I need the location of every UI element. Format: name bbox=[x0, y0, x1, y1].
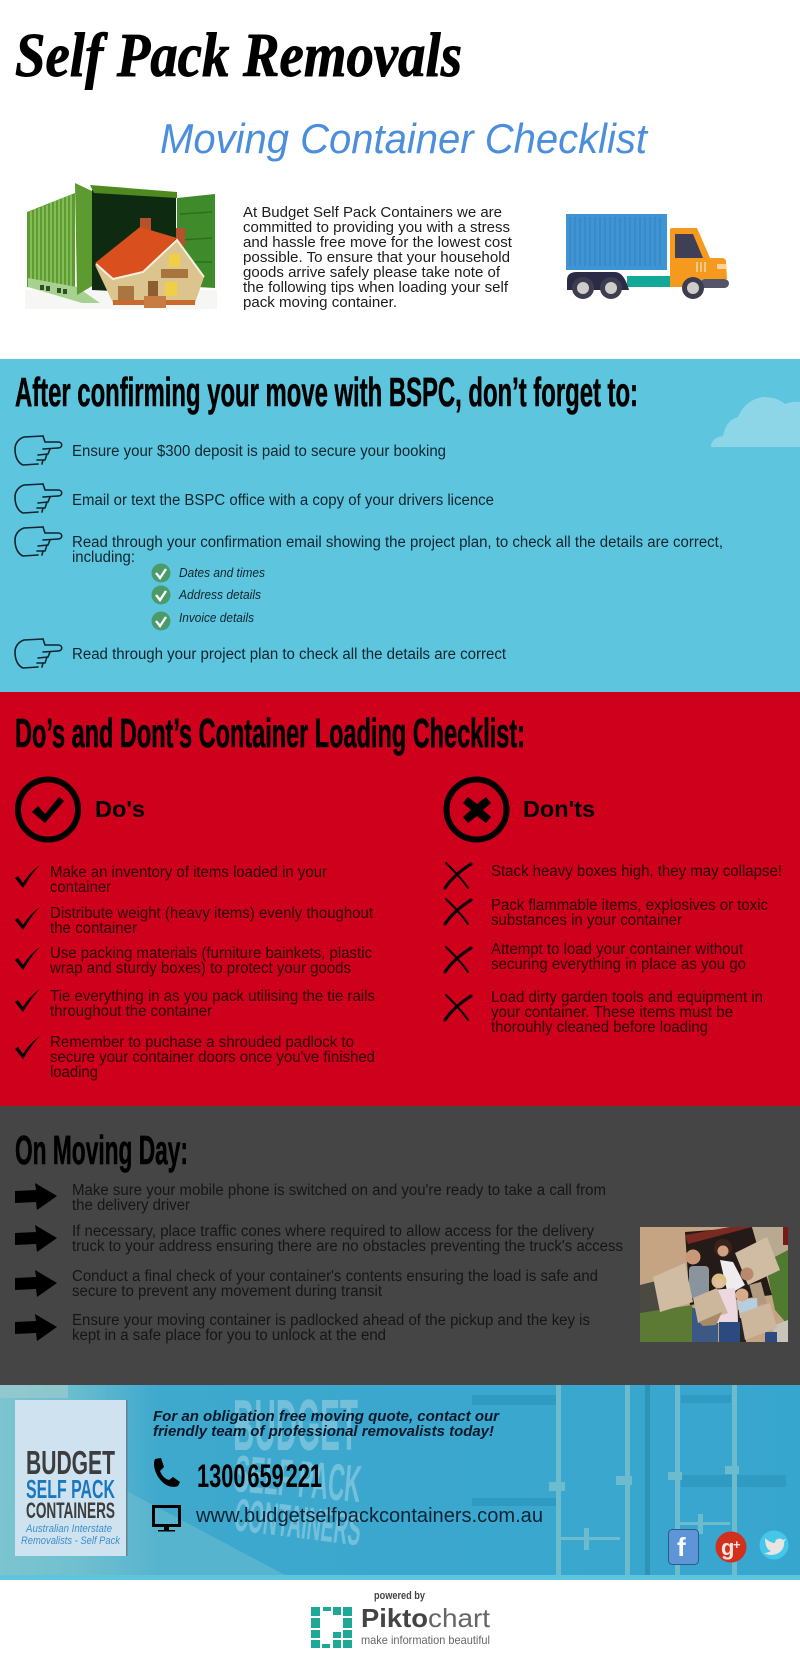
logo card: Removalists - Self Pack bbox=[21, 1535, 120, 1547]
call to action bbox=[153, 1408, 500, 1440]
sub-list: details: Dates and times bbox=[179, 566, 265, 580]
intro paragraph: possible. To ensure that your household bbox=[243, 249, 510, 266]
icon: facebook bbox=[668, 1530, 698, 1564]
list: don'ts: substances in your container bbox=[491, 912, 682, 929]
panel: contact footer: BUDGET bbox=[233, 1386, 358, 1466]
heading: do's: Do's bbox=[95, 796, 145, 822]
background text on container bbox=[232, 1386, 364, 1555]
sub-list: details: Address details bbox=[178, 588, 261, 602]
list: do's: container bbox=[50, 879, 111, 896]
list: don'ts: Load dirty garden tools and equipment in bbox=[491, 989, 763, 1006]
item: mobile phone: the delivery driver bbox=[72, 1197, 190, 1214]
item: licence: Email or text the BSPC office with a copy of your drivers licence bbox=[72, 492, 494, 509]
photo: family with boxes bbox=[640, 1227, 788, 1342]
piktochart wordmark: Pikto bbox=[361, 1603, 428, 1633]
call to action: friendly team of professional removalists today! bbox=[153, 1423, 494, 1440]
list: do's: secure your container doors once you've finished bbox=[50, 1049, 375, 1066]
phone number: 1300 659 221 bbox=[197, 1458, 322, 1494]
list: do's: the container bbox=[50, 920, 137, 937]
illustration: house in green container bbox=[25, 183, 217, 309]
item: licence bbox=[15, 484, 494, 513]
item: padlock: Ensure your moving container is padlocked ahead of the pickup and the key is bbox=[72, 1312, 590, 1329]
list: don'ts: Attempt to load your container without bbox=[491, 941, 744, 958]
logo card bbox=[15, 1400, 128, 1556]
list: do's: wrap and sturdy boxes) to protect your goods bbox=[49, 960, 351, 977]
list: do's: Distribute weight (heavy items) evenly thoughout bbox=[50, 905, 374, 922]
intro paragraph bbox=[243, 204, 513, 311]
list: do's: Remember to puchase a shrouded padlock to bbox=[50, 1034, 354, 1051]
item: traffic cones bbox=[15, 1223, 623, 1255]
sub-list: details: Invoice details bbox=[179, 611, 254, 625]
powered by: powered by bbox=[374, 1590, 426, 1602]
icon: google plus: + bbox=[733, 1537, 741, 1552]
item: confirmation email: Read through your confirmation email showing the project plan, to check all the details are correct, bbox=[72, 534, 723, 551]
page title: Self Pack Removals bbox=[15, 22, 462, 90]
logo card: SELF PACK bbox=[26, 1474, 115, 1504]
item: final check: secure to prevent any movement during transit bbox=[72, 1283, 383, 1300]
subtitle: Moving Container Checklist bbox=[160, 115, 649, 162]
item: traffic cones: If necessary, place traffic cones where required to allow access for the delivery bbox=[72, 1223, 594, 1240]
piktochart credit bbox=[311, 1590, 491, 1648]
logo card: BUDGET bbox=[26, 1444, 115, 1481]
list: don'ts: securing everything in place as you go bbox=[491, 956, 746, 973]
item: padlock bbox=[15, 1312, 590, 1344]
heading: on moving day: On Moving Day: bbox=[15, 1127, 188, 1173]
panel: after confirming bbox=[0, 359, 800, 692]
item: final check: Conduct a final check of your container's contents ensuring the load is safe and bbox=[72, 1268, 598, 1285]
icon: monitor bbox=[152, 1506, 181, 1532]
item: deposit bbox=[15, 436, 446, 465]
piktochart tagline: make information beautiful bbox=[361, 1633, 490, 1647]
list: don'ts: Pack flammable items, explosives or toxic bbox=[491, 897, 768, 914]
panel: do's and don'ts bbox=[0, 692, 800, 1106]
panel: contact footer: SELF PACK bbox=[232, 1445, 364, 1514]
list: don'ts bbox=[445, 863, 782, 1036]
intro paragraph: pack moving container. bbox=[243, 294, 397, 311]
icon: phone bbox=[154, 1458, 180, 1487]
item: project plan: Read through your project plan to check all the details are correct bbox=[72, 646, 507, 663]
panel: contact footer bbox=[0, 1385, 800, 1580]
item: deposit: Ensure your $300 deposit is paid to secure your booking bbox=[72, 443, 446, 460]
item: final check bbox=[15, 1268, 598, 1300]
icon: google plus bbox=[716, 1532, 746, 1562]
list: don'ts: Stack heavy boxes high, they may collapse! bbox=[491, 863, 782, 880]
piktochart logo mark bbox=[311, 1607, 352, 1648]
intro paragraph: goods arrive safely please take note of bbox=[243, 264, 501, 281]
footer strip bbox=[0, 1575, 800, 1580]
item: confirmation email: including: bbox=[72, 549, 135, 566]
list: do's: loading bbox=[50, 1064, 98, 1081]
icon: cloud bbox=[711, 397, 800, 447]
icon: google plus: g bbox=[721, 1535, 734, 1560]
list: don'ts: your container. These items must be bbox=[491, 1004, 733, 1021]
website: www.budgetselfpackcontainers.com.au bbox=[195, 1505, 543, 1527]
list: do's: Tie everything in as you pack utilising the tie rails bbox=[50, 988, 375, 1005]
intro paragraph: and hassle free move for the lowest cost bbox=[243, 234, 513, 251]
list: do's: throughout the container bbox=[50, 1003, 212, 1020]
item: confirmation email bbox=[15, 527, 723, 566]
piktochart credit: chart bbox=[428, 1603, 491, 1633]
panel: contact footer: CONTAINERS bbox=[232, 1488, 364, 1555]
intro paragraph: At Budget Self Pack Containers we are bbox=[243, 204, 502, 221]
heading: don'ts: Don'ts bbox=[523, 796, 595, 822]
logo card: CONTAINERS bbox=[26, 1498, 115, 1523]
item: project plan bbox=[15, 639, 507, 668]
panel: on moving day bbox=[0, 1106, 800, 1385]
item: mobile phone: Make sure your mobile phone is switched on and you're ready to take a call from bbox=[72, 1182, 606, 1199]
icon: cross circle bbox=[446, 780, 506, 840]
item: mobile phone bbox=[15, 1182, 606, 1214]
illustration: truck bbox=[566, 214, 729, 299]
sub-list: details bbox=[152, 564, 265, 630]
icon: facebook: f bbox=[677, 1532, 686, 1562]
intro paragraph: the following tips when loading your self bbox=[243, 279, 509, 296]
list: do's: Make an inventory of items loaded in your bbox=[50, 864, 327, 881]
icon: twitter bbox=[760, 1530, 788, 1560]
logo card: Australian Interstate bbox=[25, 1523, 112, 1535]
item: padlock: kept in a safe place for you to unlock at the end bbox=[72, 1327, 386, 1344]
list: do's bbox=[15, 864, 375, 1081]
list: don'ts: thorouhly cleaned before loading bbox=[491, 1019, 708, 1036]
item: traffic cones: truck to your address ensuring there are no obstacles preventing the truck's access bbox=[72, 1238, 623, 1255]
icon: check circle bbox=[18, 780, 78, 840]
list: do's: Use packing materials (furniture bainkets, plastic bbox=[50, 945, 372, 962]
call to action: For an obligation free moving quote, contact our bbox=[153, 1408, 500, 1425]
intro paragraph: committed to providing you with a stress bbox=[243, 219, 510, 236]
